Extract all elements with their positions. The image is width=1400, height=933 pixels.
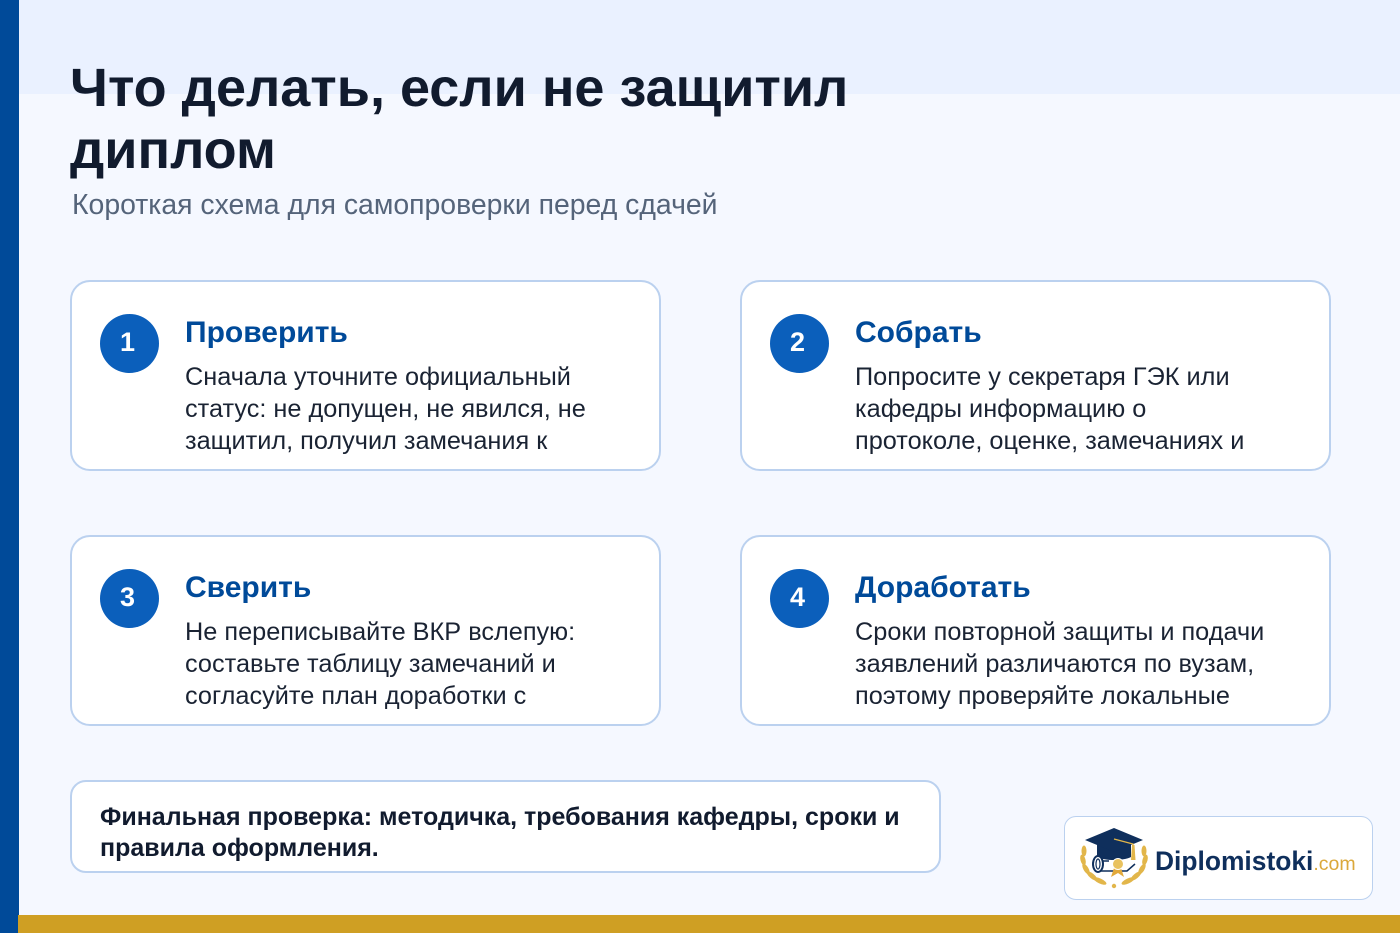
step 3 text: согласуйте план доработки с	[185, 682, 526, 710]
step 3 number	[100, 569, 159, 628]
step 2 text	[855, 363, 1244, 455]
bottom gold bar	[18, 915, 1400, 933]
title: диплом	[70, 120, 276, 180]
step 3 text: Не переписывайте ВКР вслепую:	[185, 618, 575, 646]
step 2 heading: Собрать	[855, 316, 982, 349]
logo wordmark: Diplomistoki.com	[1155, 846, 1356, 876]
step 4 text	[855, 618, 1264, 710]
subtitle: Короткая схема для самопроверки перед сдачей	[72, 189, 718, 221]
title	[70, 58, 848, 180]
step 3 number: 3	[120, 582, 135, 612]
panel: step 3	[70, 535, 661, 726]
icon: graduation cap with laurel	[1080, 828, 1148, 888]
step 1 text: защитил, получил замечания к	[185, 427, 547, 455]
step 4 heading: Доработать	[855, 571, 1031, 604]
step 2 text: протоколе, оценке, замечаниях и	[855, 427, 1244, 455]
step 2 text: кафедры информацию о	[855, 395, 1146, 423]
step 1 text	[185, 363, 586, 455]
logo	[1064, 816, 1373, 900]
step 3 text: составьте таблицу замечаний и	[185, 650, 556, 678]
step 2 text: Попросите у секретаря ГЭК или	[855, 363, 1230, 391]
title: Что делать, если не защитил	[70, 58, 848, 118]
panel: step 4	[740, 535, 1331, 726]
step 4 text: заявлений различаются по вузам,	[855, 650, 1254, 678]
callout: final check	[70, 780, 941, 873]
step 3 text	[185, 618, 575, 710]
panel: step 2	[740, 280, 1331, 471]
step 1 text: Сначала уточните официальный	[185, 363, 571, 391]
step 1 number: 1	[120, 327, 135, 357]
step 1 heading: Проверить	[185, 316, 348, 349]
step 3 heading: Сверить	[185, 571, 311, 604]
callout: final check: правила оформления.	[100, 834, 379, 862]
step 2 number	[770, 314, 829, 373]
callout: final check: Финальная проверка: методичка, требования кафедры, сроки и	[100, 803, 900, 831]
step 4 text: Сроки повторной защиты и подачи	[855, 618, 1264, 646]
step 4 number	[770, 569, 829, 628]
left accent bar	[0, 0, 19, 933]
step 2 number: 2	[790, 327, 805, 357]
top band	[18, 0, 1400, 94]
step 1 number	[100, 314, 159, 373]
step 4 text: поэтому проверяйте локальные	[855, 682, 1230, 710]
panel: step 1	[70, 280, 661, 471]
step 1 text: статус: не допущен, не явился, не	[185, 395, 586, 423]
step 4 number: 4	[790, 582, 805, 612]
